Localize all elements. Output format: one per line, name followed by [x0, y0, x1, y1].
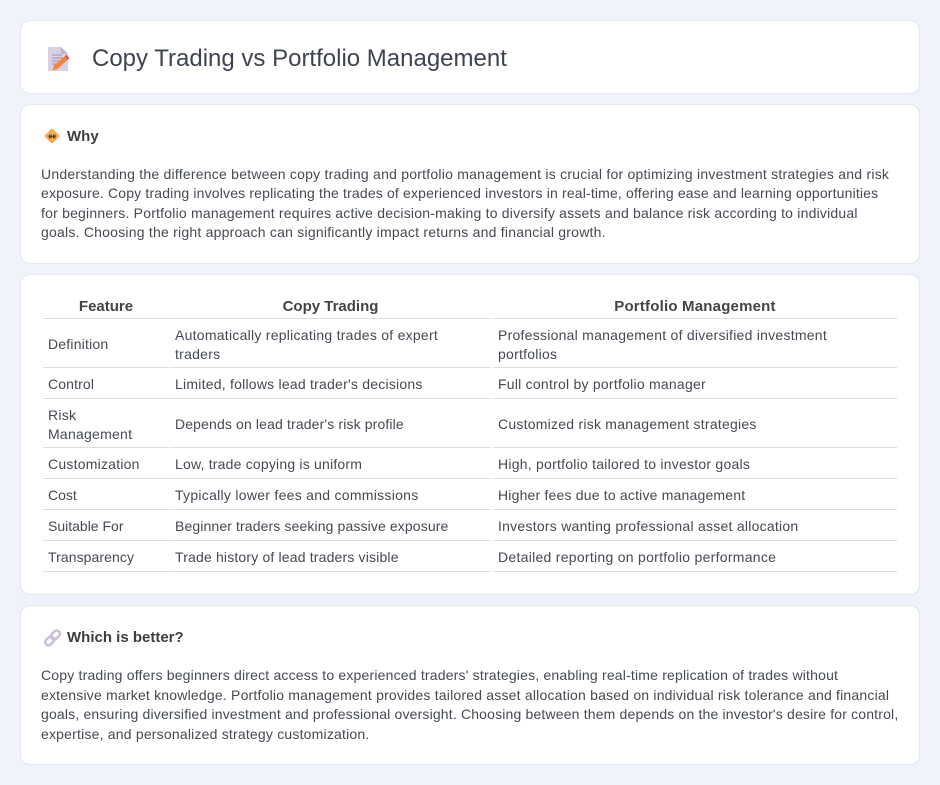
why text block: [41, 166, 889, 240]
panel: comparison table: [20, 274, 920, 595]
row: risk management: Risk: [48, 407, 76, 423]
customization portfolio management: High, portfolio tailored to investor goals: [498, 456, 750, 472]
row: cost: Cost: [48, 487, 77, 503]
table header: portfolio management: Portfolio Management: [614, 298, 776, 315]
row: suitable for: Suitable For: [48, 518, 123, 534]
cost copy trading: Typically lower fees and commissions: [175, 487, 418, 503]
why text block: for beginners. Portfolio management requires active decision-making to diversify assets and balance risk according to individual: [41, 205, 858, 221]
why text block: goals. Choosing the right approach can significantly impact returns and financial growth.: [41, 224, 606, 240]
row: definition: Definition: [48, 336, 108, 352]
row: risk management: Management: [48, 426, 132, 442]
definition copy trading: traders: [175, 346, 220, 362]
which is better text block: [41, 667, 898, 742]
suitable portfolio management: Investors wanting professional asset allocation: [498, 518, 798, 534]
panel: which is better: [20, 605, 920, 765]
icon: chain link: [44, 629, 62, 647]
table header: copy trading: Copy Trading: [283, 298, 378, 315]
suitable copy trading: Beginner traders seeking passive exposure: [175, 518, 448, 534]
table header: feature: Feature: [79, 298, 133, 315]
panel: why: [20, 104, 920, 264]
definition copy trading: Automatically replicating trades of expert: [175, 327, 438, 343]
transparency portfolio management: Detailed reporting on portfolio performance: [498, 549, 776, 565]
which is better text block: extensive market knowledge. Portfolio management provides tailored asset allocation based on individual risk tolerance and financial: [41, 687, 889, 703]
row: control: Control: [48, 376, 94, 392]
title: Copy Trading vs Portfolio Management: [92, 45, 507, 72]
which is better text block: expertise, and personalized strategy customization.: [41, 726, 369, 742]
cost portfolio management: Higher fees due to active management: [498, 487, 745, 503]
which is better text block: goals, ensuring diversified investment and professional oversight. Choosing between them depends on the investor's desire for control,: [41, 706, 898, 722]
icon: warning diamond: [44, 128, 60, 144]
heading: why: Why: [67, 128, 99, 144]
risk portfolio management: Customized risk management strategies: [498, 416, 757, 432]
row: transparency: Transparency: [48, 549, 134, 565]
icon: document with pencil: [48, 47, 70, 71]
transparency copy trading: Trade history of lead traders visible: [175, 549, 399, 565]
definition copy trading: [175, 327, 438, 362]
why text block: exposure. Copy trading involves replicating the trades of experienced investors in real-time, offering ease and learning opportunities: [41, 185, 878, 201]
control copy trading: Limited, follows lead trader's decisions: [175, 376, 423, 392]
which is better text block: Copy trading offers beginners direct access to experienced traders' strategies, enabling real-time replication of trades without: [41, 667, 838, 683]
risk copy trading: Depends on lead trader's risk profile: [175, 416, 404, 432]
control portfolio management: Full control by portfolio manager: [498, 376, 706, 392]
panel: header: [20, 20, 920, 94]
definition portfolio management: Professional management of diversified investment: [498, 327, 827, 343]
why text block: Understanding the difference between copy trading and portfolio management is crucial for optimizing investment strategies and risk: [41, 166, 889, 182]
customization copy trading: Low, trade copying is uniform: [175, 456, 362, 472]
row: risk management: [48, 407, 132, 442]
row: customization: Customization: [48, 456, 140, 472]
definition portfolio management: portfolios: [498, 346, 557, 362]
heading: which is better: Which is better?: [67, 628, 184, 646]
definition portfolio management: [498, 327, 827, 362]
